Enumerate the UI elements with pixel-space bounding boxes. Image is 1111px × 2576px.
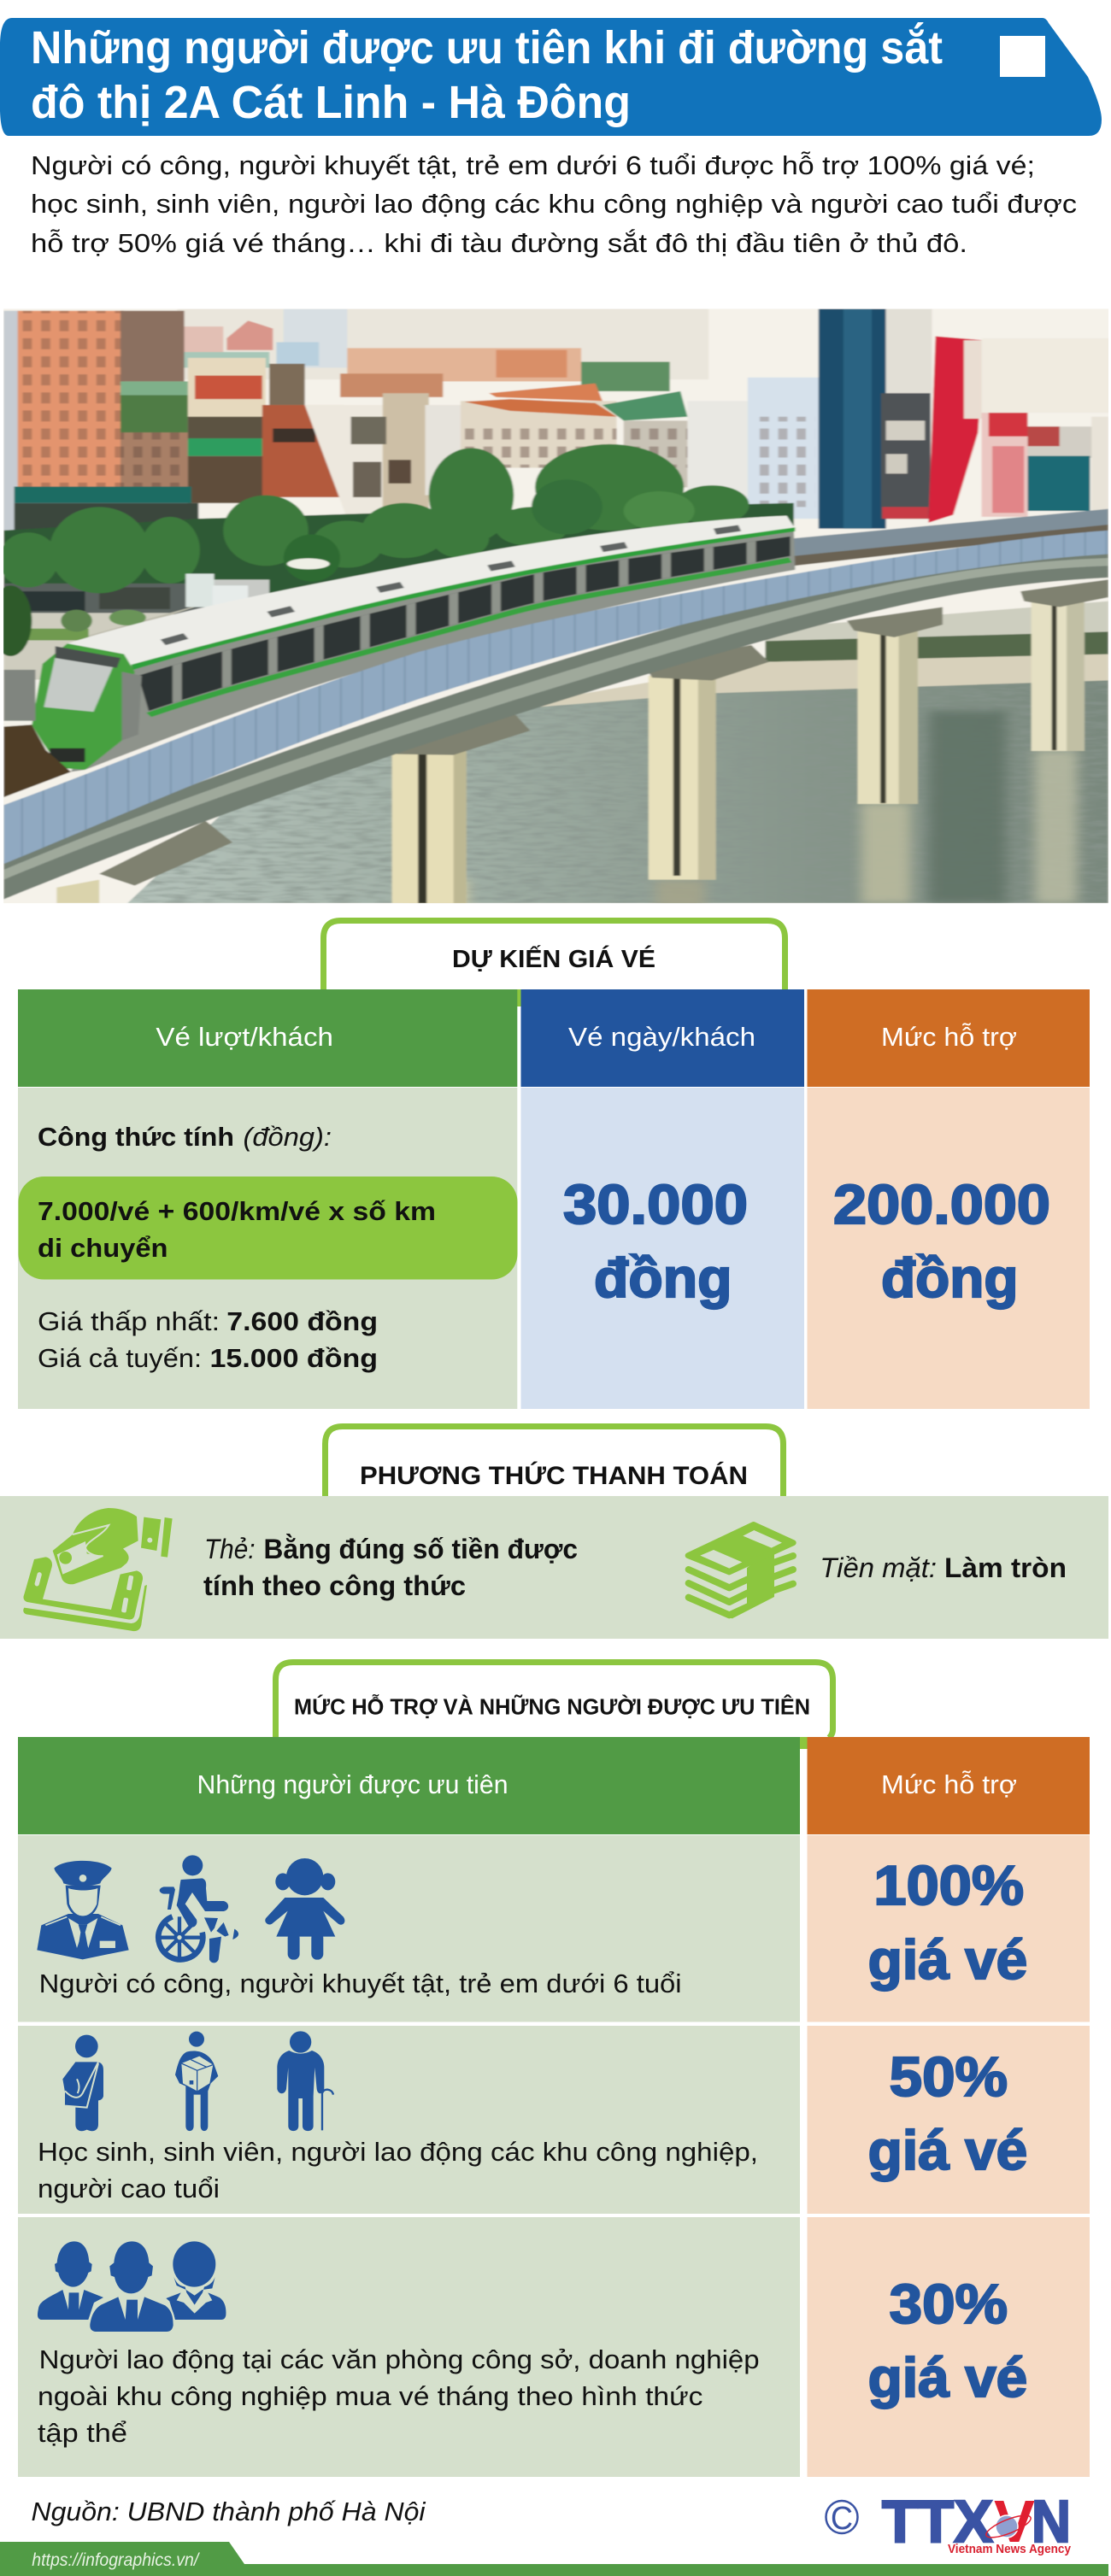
- payment text: cash: [820, 1552, 1067, 1583]
- intro paragraph: Người có công, người khuyết tật, trẻ em dưới 6 tuổi được hỗ trợ 100% giá vé;: [31, 150, 1035, 180]
- section tab: du kien gia ve: [323, 921, 785, 989]
- title banner: [0, 18, 1102, 136]
- intro paragraph: học sinh, sinh viên, người lao động các khu công nghiệp và người cao tuổi được: [31, 189, 1077, 219]
- row value: 100%: [873, 1854, 1024, 1916]
- far bank: [765, 601, 1108, 642]
- row text: Người có công, người khuyết tật, trẻ em dưới 6 tuổi: [39, 1969, 682, 1998]
- intro paragraph: hỗ trợ 50% giá vé tháng… khi đi tàu đường sắt đô thị đầu tiên ở thủ đô.: [31, 228, 967, 258]
- water: [127, 668, 1108, 903]
- lowest and full fares: Giá cả tuyến:: [38, 1343, 202, 1373]
- row value: [868, 2045, 1027, 2181]
- train windows: [138, 537, 791, 711]
- noise barrier: [3, 531, 1108, 864]
- row text: Học sinh, sinh viên, người lao động các khu công nghiệp,: [38, 2137, 758, 2167]
- column: ve ngay: 30.000: [563, 1173, 748, 1235]
- lowest and full fares: [38, 1306, 378, 1373]
- logo: TTXVN: V: [994, 2488, 1035, 2555]
- source note: Nguồn: UBND thành phố Hà Nội: [31, 2497, 426, 2526]
- logo: TTXVN: Vietnam News Agency: [948, 2542, 1072, 2556]
- payment text: card: [203, 1534, 578, 1601]
- ground and cars: [3, 584, 209, 615]
- formula pill: di chuyển: [38, 1233, 168, 1263]
- section tab: muc ho tro: [275, 1663, 832, 1738]
- row: 50 percent: [18, 2026, 1090, 2214]
- row text: tập thể: [38, 2418, 127, 2448]
- table: du kien gia ve: [18, 989, 1090, 1409]
- logo: TTXVN: [882, 2488, 1072, 2556]
- icon: stack of cash: [688, 1524, 793, 1618]
- city: [3, 311, 19, 531]
- banner window icon: [1000, 36, 1045, 77]
- formula label: (đồng):: [243, 1122, 332, 1152]
- payment text: cash: Tiền mặt:: [820, 1552, 937, 1583]
- title line 2: đô thị 2A Cát Linh - Hà Đông: [31, 77, 631, 128]
- formula pill: 7.000/vé + 600/km/vé x số km: [38, 1196, 436, 1226]
- icon: officer: [37, 1861, 129, 1959]
- viaduct deck: [3, 550, 1108, 900]
- table header: nhung nguoi duoc uu tien: Những người được ưu tiên: [197, 1769, 508, 1799]
- icon: card and phone payment: [23, 1508, 173, 1631]
- row text: người cao tuổi: [38, 2174, 220, 2203]
- formula pill: [19, 1177, 518, 1280]
- section heading: PHƯƠNG THỨC THANH TOÁN: [360, 1461, 748, 1490]
- column: ve luot: Vé lượt/khách: [156, 1022, 333, 1052]
- footer url: https://infographics.vn/: [32, 2550, 200, 2570]
- lowest and full fares: 15.000 đồng: [210, 1343, 378, 1373]
- column: ve ngay: Vé ngày/khách: [568, 1022, 755, 1052]
- row value: [868, 2273, 1027, 2409]
- logo: TTXVN: N: [1032, 2488, 1071, 2555]
- payment text: card: Thẻ:: [204, 1534, 255, 1564]
- row value: 30%: [890, 2273, 1008, 2335]
- row value: giá vé: [868, 1928, 1027, 1991]
- section heading: MỨC HỖ TRỢ VÀ NHỮNG NGƯỜI ĐƯỢC ƯU TIÊN: [294, 1693, 810, 1719]
- formula label: [38, 1122, 332, 1152]
- intro paragraph: [31, 150, 1077, 258]
- column: muc ho tro: Mức hỗ trợ: [881, 1022, 1017, 1052]
- icon: office workers: [38, 2241, 226, 2332]
- pier caps: [99, 579, 1108, 886]
- row text: [38, 2344, 760, 2448]
- title line 1: Những người được ưu tiên khi đi đường sắt: [31, 22, 943, 73]
- payment text: card: Bằng đúng số tiền được: [263, 1534, 578, 1564]
- footer bar: [0, 2542, 1108, 2576]
- row: 30 percent: [18, 2217, 1090, 2477]
- photo: Cat Linh - Ha Dong train on viaduct: [0, 299, 1111, 907]
- row: 100 percent: [18, 1835, 1090, 2021]
- payment text: cash: Làm tròn: [944, 1552, 1067, 1583]
- table header: muc ho tro: [807, 1737, 1090, 1834]
- row value: giá vé: [868, 2346, 1027, 2409]
- column: muc ho tro: 200.000: [833, 1173, 1050, 1235]
- column: muc ho tro: [807, 989, 1090, 1409]
- trees: [0, 444, 749, 656]
- icon: worker carrying box: [175, 2032, 218, 2131]
- piers: [404, 711, 1078, 907]
- row value: [868, 1854, 1027, 1991]
- column: ve luot: [18, 989, 518, 1409]
- row text: [38, 2137, 758, 2203]
- row value: 50%: [890, 2045, 1008, 2108]
- logo: TTXVN: TTX: [882, 2488, 993, 2555]
- copyright mark: C: [831, 2501, 853, 2537]
- icon: child: [265, 1858, 344, 1960]
- dark backdrop behind the train: [3, 502, 795, 593]
- far viaduct strip: [794, 509, 1108, 558]
- section heading: DỰ KIẾN GIÁ VÉ: [452, 944, 655, 973]
- column: muc ho tro: đồng: [881, 1247, 1019, 1309]
- icon: elderly person: [277, 2031, 333, 2131]
- section tab: phuong thuc thanh toan: [325, 1427, 783, 1497]
- train roof: [68, 515, 795, 666]
- icon: student: [62, 2035, 103, 2131]
- lowest and full fares: 7.600 đồng: [226, 1306, 378, 1336]
- table header: nhung nguoi duoc uu tien: [18, 1737, 800, 1834]
- train side: [71, 529, 795, 772]
- panel: payment methods: [0, 1496, 1108, 1639]
- row text: Người lao động tại các văn phòng công sở, doanh nghiệp: [39, 2344, 760, 2374]
- row value: giá vé: [868, 2119, 1027, 2181]
- column: ve ngay: đồng: [594, 1247, 732, 1309]
- table: priority groups: [18, 1737, 1090, 2477]
- train front: [32, 643, 135, 770]
- icon: wheelchair user: [158, 1855, 238, 1963]
- column: ve ngay: [521, 989, 804, 1409]
- lower green stripe: [149, 560, 791, 715]
- row text: ngoài khu công nghiệp mua vé tháng theo hình thức: [38, 2381, 702, 2411]
- lowest and full fares: Giá thấp nhất:: [38, 1306, 220, 1336]
- payment text: card: tính theo công thức: [203, 1570, 466, 1601]
- formula label: Công thức tính: [38, 1122, 234, 1152]
- table header: muc ho tro: Mức hỗ trợ: [881, 1769, 1017, 1799]
- left track area: [3, 670, 35, 721]
